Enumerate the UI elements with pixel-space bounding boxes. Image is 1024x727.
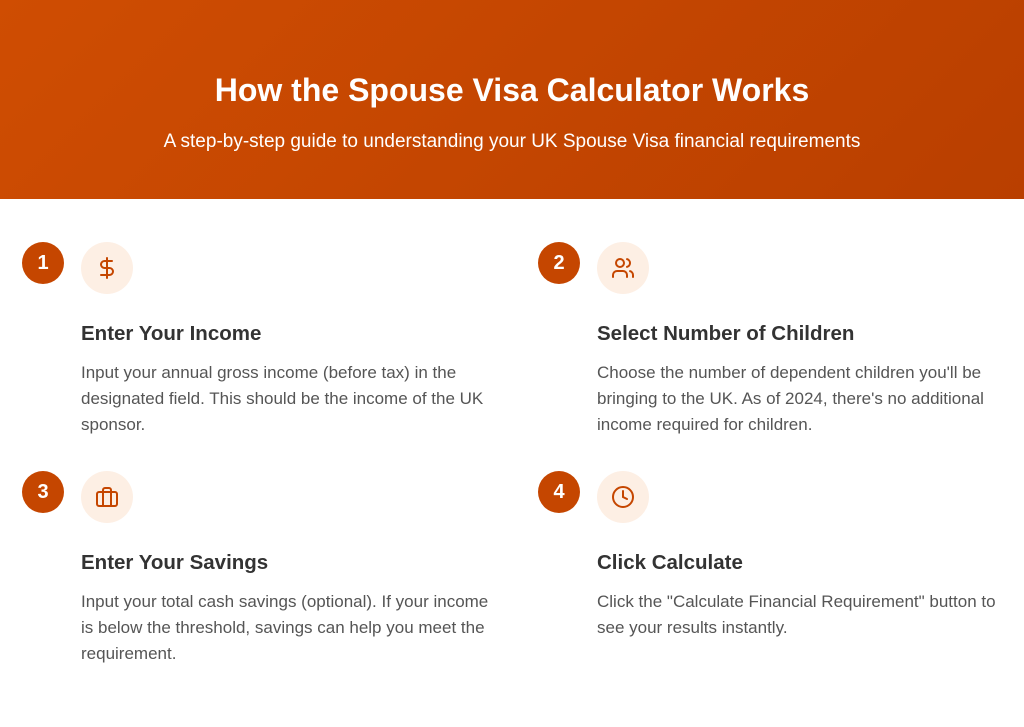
step 1 bbox=[22, 242, 483, 434]
heading: Click Calculate bbox=[597, 551, 743, 574]
title: How the Spouse Visa Calculator Works bbox=[215, 72, 809, 108]
badge 2: 2 bbox=[553, 252, 565, 274]
subtitle: A step-by-step guide to understanding your UK Spouse Visa financial requirements bbox=[164, 131, 860, 152]
badge 4 bbox=[538, 471, 580, 513]
text: Click the "Calculate Financial Requirement" button to see your results instantly. bbox=[597, 592, 996, 637]
icon: clock bbox=[597, 471, 649, 523]
text: Choose the number of dependent children you'll be bringing to the UK. As of 2024, there's no additional income required for children. bbox=[597, 363, 984, 434]
text: Input your annual gross income (before tax) in the designated field. This should be the income of the UK sponsor. bbox=[81, 363, 483, 434]
text: Input your total cash savings (optional). If your income is below the threshold, savings can help you meet the requirement. bbox=[81, 592, 488, 663]
badge 2 bbox=[538, 242, 580, 284]
icon: dollar bbox=[81, 242, 133, 294]
step 2 bbox=[538, 242, 984, 434]
icon: users bbox=[597, 242, 649, 294]
step 4 bbox=[538, 471, 996, 637]
badge 3: 3 bbox=[37, 481, 49, 503]
badge 1 bbox=[22, 242, 64, 284]
badge 1: 1 bbox=[37, 252, 49, 274]
icon: briefcase bbox=[81, 471, 133, 523]
badge 3 bbox=[22, 471, 64, 513]
header bbox=[0, 0, 1024, 199]
heading: Enter Your Income bbox=[81, 322, 261, 345]
badge 4: 4 bbox=[553, 481, 565, 503]
step 3 bbox=[22, 471, 488, 663]
heading: Select Number of Children bbox=[597, 322, 854, 345]
heading: Enter Your Savings bbox=[81, 551, 268, 574]
